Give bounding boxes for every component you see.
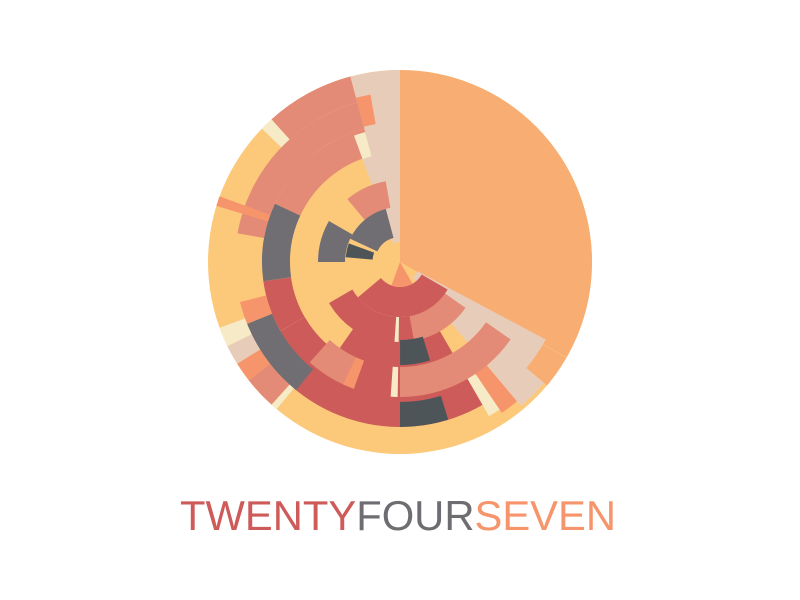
- chart: radial sunburst: [148, 10, 652, 514]
- title: TWENTYFOURSEVEN: [180, 492, 616, 539]
